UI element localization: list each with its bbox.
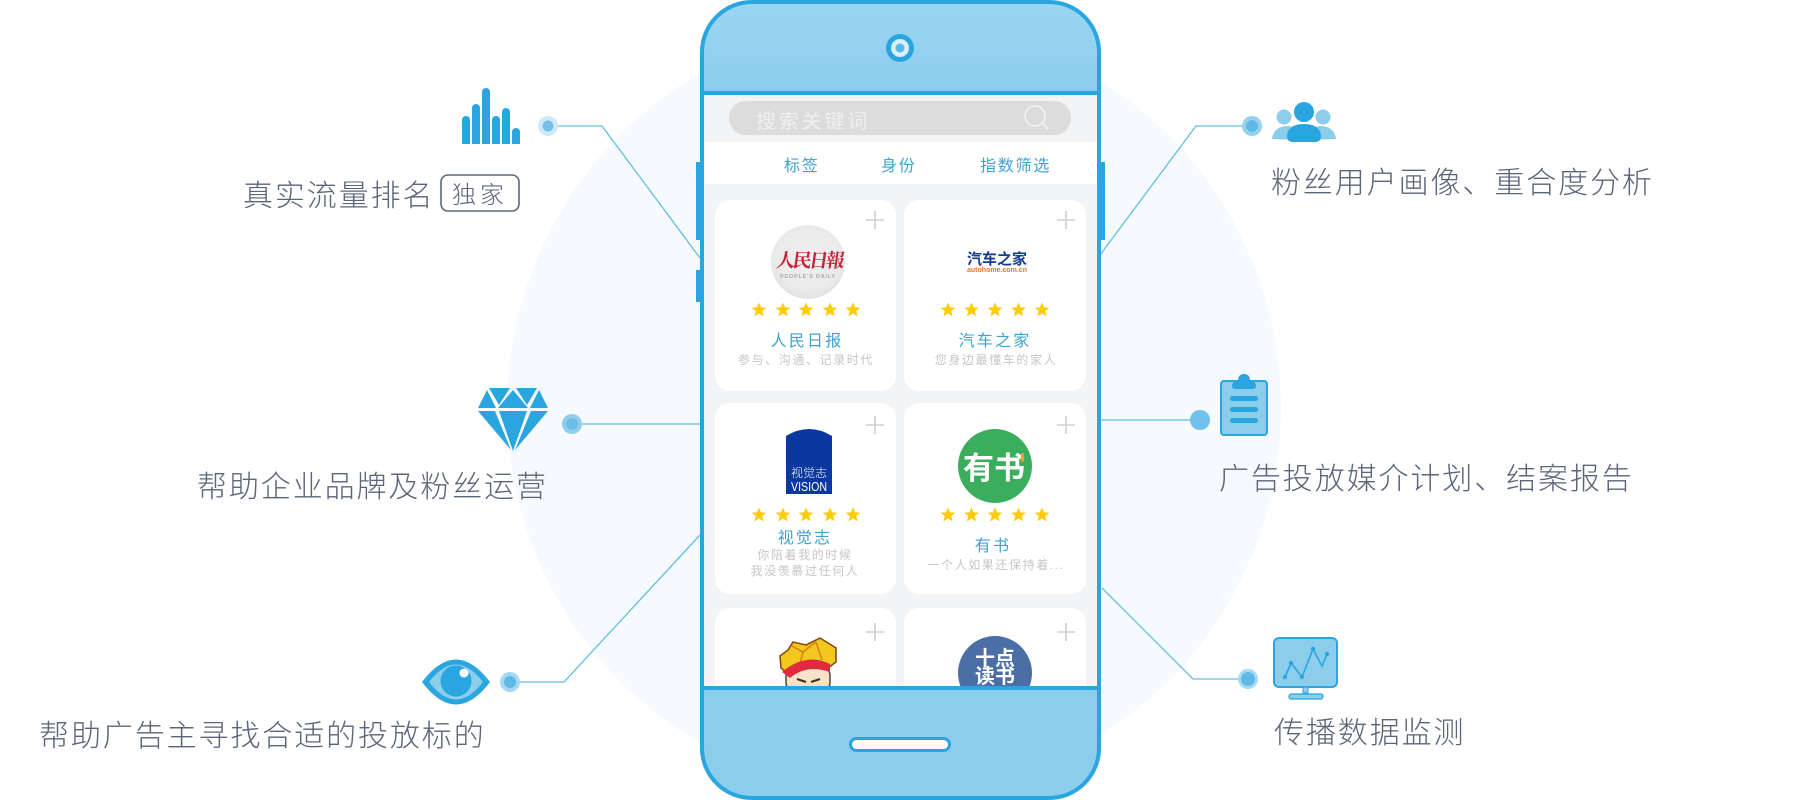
card: vision xyxy=(715,403,896,594)
filter tabs: 身份 xyxy=(881,157,917,175)
card: vision: 我没羡慕过任何人 xyxy=(751,563,859,578)
tag: exclusive: 独家 xyxy=(452,182,508,209)
phone top bezel xyxy=(700,0,1100,95)
card: cartoon account xyxy=(715,608,896,686)
filter tabs xyxy=(704,142,1097,184)
label: find targets: 帮助广告主寻找合适的投放标的 xyxy=(39,720,486,753)
connector: monitoring xyxy=(1102,588,1258,689)
logo: youshu xyxy=(958,429,1032,503)
screen xyxy=(704,101,1097,686)
stars xyxy=(752,302,860,316)
card: youshu xyxy=(904,403,1086,594)
label: traffic ranking xyxy=(243,175,519,213)
icon: bar chart xyxy=(462,88,520,144)
card: autohome xyxy=(904,200,1086,391)
card: autohome: 您身边最懂车的家人 xyxy=(935,352,1057,367)
logo: people's daily xyxy=(771,225,847,299)
logo: autohome: 汽车之家 xyxy=(967,250,1027,268)
card: ten o'clock reading xyxy=(904,608,1086,686)
side buttons xyxy=(696,162,1105,302)
card: people's daily xyxy=(715,200,896,391)
card: vision: 视觉志 xyxy=(778,529,832,547)
phone body xyxy=(702,2,1099,798)
label: brand operation: 帮助企业品牌及粉丝运营 xyxy=(197,471,548,504)
logo: autohome: autohome.com.cn xyxy=(967,265,1027,274)
connector: media plan xyxy=(1100,410,1210,430)
logo: youshu: 有书 xyxy=(963,451,1025,486)
phone outline xyxy=(702,2,1099,798)
stars xyxy=(941,302,1049,316)
card: youshu: 一个人如果还保持着... xyxy=(927,557,1065,572)
card: people's daily: 人民日报 xyxy=(771,332,843,350)
icon: clipboard xyxy=(1221,374,1267,435)
icon: monitor xyxy=(1274,638,1337,699)
label: monitoring: 传播数据监测 xyxy=(1274,717,1465,750)
label: fan profile: 粉丝用户画像、重合度分析 xyxy=(1271,167,1654,200)
logo: people's daily: PEOPLE'S DAILY xyxy=(780,274,836,280)
card: autohome: 汽车之家 xyxy=(959,332,1031,350)
search band: 搜索关键词 xyxy=(756,110,870,133)
logo: ten o'clock reading xyxy=(958,636,1032,686)
background circle xyxy=(507,21,1281,795)
icon: search xyxy=(1025,106,1048,129)
logo: ten o'clock reading: 读书 xyxy=(975,665,1015,688)
camera xyxy=(886,34,914,62)
connector: brand operation xyxy=(562,414,700,434)
connector: find targets xyxy=(500,535,700,692)
phone xyxy=(696,0,1105,800)
home button xyxy=(850,738,950,750)
card: people's daily: 参与、沟通、记录时代 xyxy=(738,352,874,367)
stars xyxy=(941,507,1049,521)
tag: exclusive xyxy=(441,175,519,211)
connector: fan profile xyxy=(1100,116,1262,255)
stars xyxy=(752,507,860,521)
filter tabs: 标签 xyxy=(784,157,820,175)
phone bottom bezel xyxy=(700,686,1100,800)
icon: diamond xyxy=(478,388,548,451)
icon: eye xyxy=(422,660,490,704)
logo: vision: VISION xyxy=(791,480,827,494)
logo: people's daily: 人民日報 xyxy=(775,246,847,273)
label: traffic ranking: 真实流量排名 xyxy=(243,180,434,213)
filter tabs: 指数筛选 xyxy=(980,156,1051,175)
card: youshu: 有书 xyxy=(975,537,1011,555)
search band xyxy=(729,101,1071,135)
logo: vision: 视觉志 xyxy=(791,466,827,480)
logo: cartoon head xyxy=(780,638,836,694)
logo: ten o'clock reading: 十点 xyxy=(975,647,1015,670)
card: vision: 你陪着我的时候 xyxy=(757,547,853,562)
icon: users xyxy=(1272,102,1336,142)
label: media plan: 广告投放媒介计划、结案报告 xyxy=(1219,463,1634,496)
connector: traffic ranking xyxy=(538,116,700,258)
logo: vision xyxy=(786,429,832,494)
